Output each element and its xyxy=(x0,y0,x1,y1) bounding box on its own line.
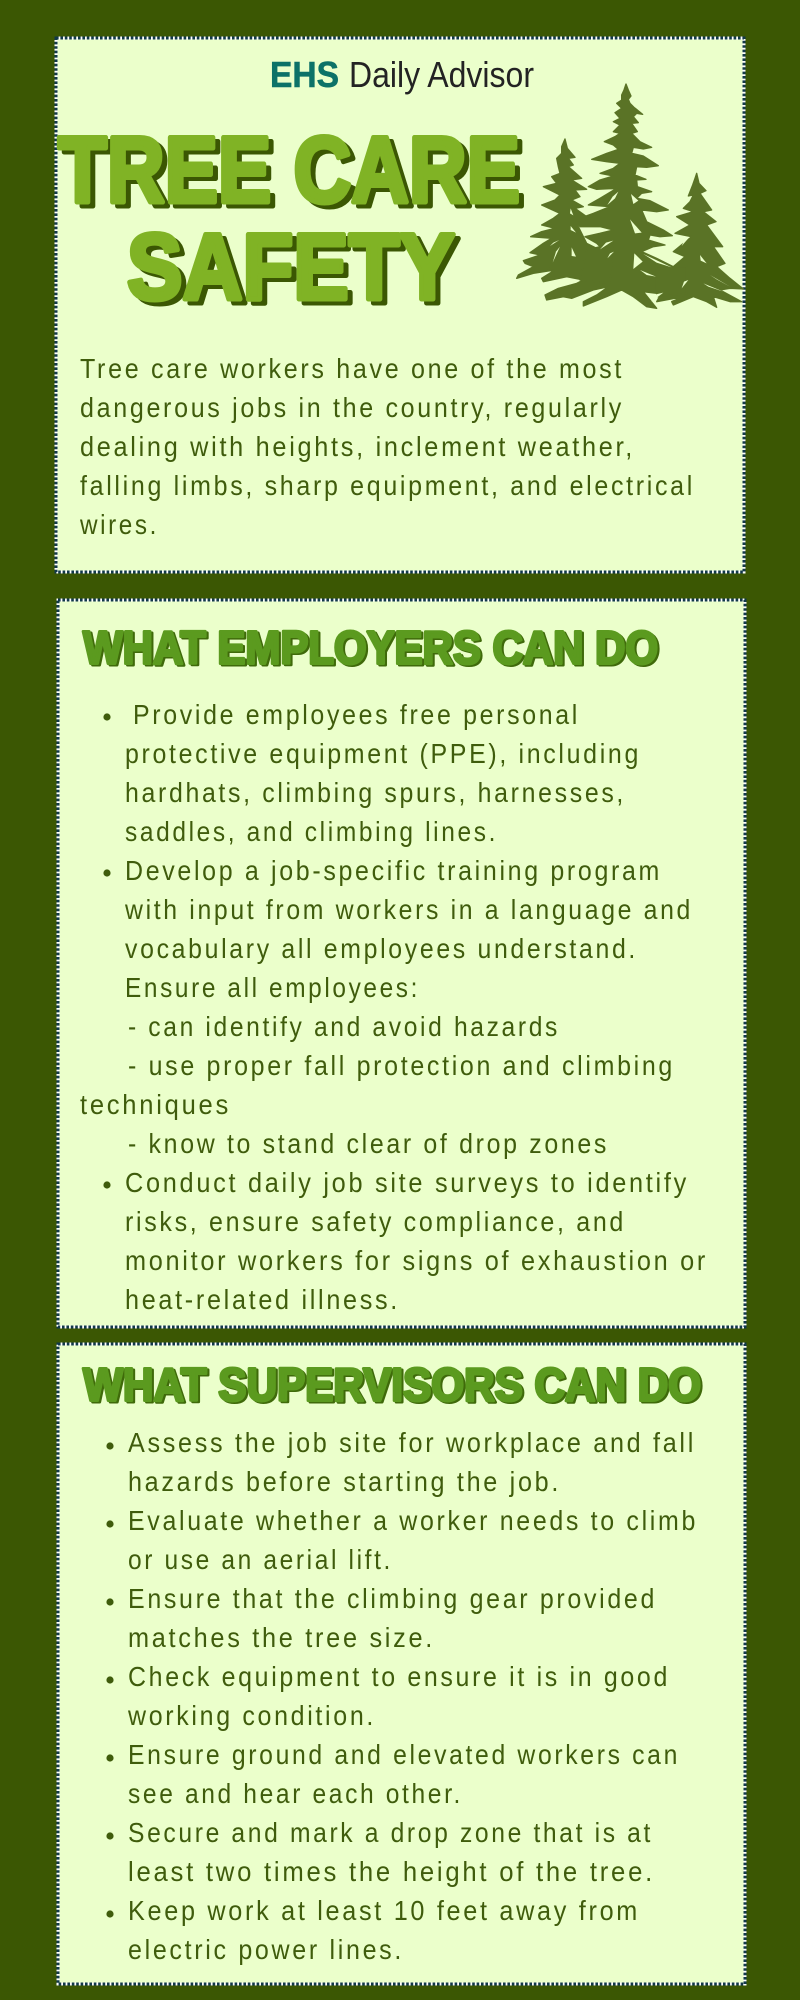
list: supervisor actions xyxy=(106,1427,698,1965)
list: employer actions: - can identify and avoid hazards xyxy=(128,1011,560,1042)
list: employer actions: techniques xyxy=(80,1089,231,1120)
list: employer actions: - know to stand clear of drop zones xyxy=(128,1128,609,1159)
title: Tree Care Safety: SAFETY xyxy=(127,214,455,319)
panel: what employers can do xyxy=(58,600,745,1327)
text block: intro paragraph xyxy=(79,353,695,540)
panel: what supervisors can do xyxy=(58,1344,745,1984)
title: Tree Care Safety xyxy=(58,117,525,323)
heading: what supervisors can do: WHAT SUPERVISORS CAN DO xyxy=(85,1360,703,1412)
heading: what supervisors can do: WHAT SUPERVISORS CAN DO xyxy=(83,1358,701,1410)
list: employer actions: protective equipment (PPE), including xyxy=(125,738,641,769)
heading: what employers can do: WHAT EMPLOYERS CAN DO xyxy=(83,622,658,674)
list: supervisor actions: see and hear each other. xyxy=(128,1778,463,1809)
title: Tree Care Safety: TREE CARE xyxy=(63,121,525,226)
list: supervisor actions: or use an aerial lift. xyxy=(128,1544,393,1575)
logo: EHS Daily Advisor: Daily Advisor xyxy=(349,54,534,95)
list: supervisor actions: electric power lines. xyxy=(128,1934,404,1965)
panel: intro xyxy=(56,38,744,572)
heading: what employers can do: WHAT EMPLOYERS CAN DO xyxy=(85,623,660,675)
title: Tree Care Safety: TREE CARE xyxy=(58,117,520,222)
list: employer actions: Conduct daily job site surveys to identify xyxy=(125,1167,689,1198)
list: employer actions: Provide employees free personal xyxy=(133,699,580,730)
list: employer actions: hardhats, climbing spurs, harnesses, xyxy=(125,777,626,808)
list: employer actions: saddles, and climbing lines. xyxy=(125,816,498,847)
list: supervisor actions: Ensure that the climbing gear provided xyxy=(128,1583,657,1614)
list: employer actions: risks, ensure safety compliance, and xyxy=(125,1206,626,1237)
logo: EHS Daily Advisor: EHS xyxy=(270,54,339,95)
text block: intro paragraph: wires. xyxy=(79,509,159,540)
list: employer actions: Develop a job-specific training program xyxy=(125,855,662,886)
list: supervisor actions: Ensure ground and elevated workers can xyxy=(128,1739,680,1770)
list: supervisor actions: working condition. xyxy=(127,1700,376,1731)
list: supervisor actions: least two times the height of the tree. xyxy=(128,1856,655,1887)
list: supervisor actions: matches the tree size. xyxy=(128,1622,435,1653)
list: employer actions: with input from workers in a language and xyxy=(124,894,693,925)
list: supervisor actions: Evaluate whether a worker needs to climb xyxy=(128,1505,698,1536)
list: supervisor actions: Assess the job site for workplace and fall xyxy=(128,1427,696,1458)
text block: intro paragraph: dangerous jobs in the country, regularly xyxy=(80,392,624,423)
list: employer actions xyxy=(80,699,708,1315)
icon: pine trees xyxy=(517,84,743,308)
list: employer actions: monitor workers for signs of exhaustion or xyxy=(125,1245,708,1276)
list: employer actions: Ensure all employees: xyxy=(125,972,420,1003)
list: supervisor actions: Secure and mark a drop zone that is at xyxy=(128,1817,653,1848)
list: supervisor actions: hazards before starting the job. xyxy=(128,1466,561,1497)
list: employer actions: vocabulary all employees understand. xyxy=(125,933,638,964)
logo: EHS Daily Advisor xyxy=(270,54,534,95)
text block: intro paragraph: falling limbs, sharp equipment, and electrical xyxy=(80,470,695,501)
text block: intro paragraph: Tree care workers have one of the most xyxy=(80,353,624,384)
title: Tree Care Safety: SAFETY xyxy=(132,218,460,323)
text block: intro paragraph: dealing with heights, inclement weather, xyxy=(80,431,635,462)
list: supervisor actions: Keep work at least 10 feet away from xyxy=(128,1895,640,1926)
list: employer actions: heat-related illness. xyxy=(125,1284,400,1315)
list: supervisor actions: Check equipment to ensure it is in good xyxy=(128,1661,670,1692)
list: employer actions: - use proper fall protection and climbing xyxy=(128,1050,675,1081)
